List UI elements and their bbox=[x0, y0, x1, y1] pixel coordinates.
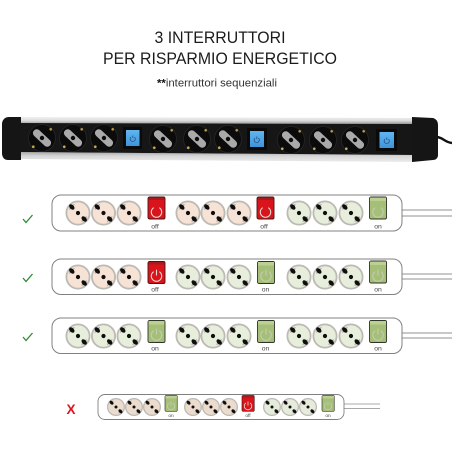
labels: off bbox=[245, 413, 251, 419]
sockets bbox=[66, 201, 251, 225]
labels: on bbox=[262, 286, 269, 294]
strip outline bbox=[52, 259, 402, 294]
diagram row 4: incorrect sequence bbox=[66, 394, 380, 420]
labels: on bbox=[374, 286, 382, 294]
black faceplate bbox=[20, 123, 415, 155]
labels bbox=[151, 286, 382, 294]
labels: off bbox=[151, 286, 159, 294]
blue switch 2 bbox=[247, 128, 267, 150]
strip outline bbox=[98, 394, 344, 420]
labels bbox=[151, 346, 382, 352]
labels bbox=[168, 413, 331, 419]
labels: on bbox=[262, 346, 269, 352]
diagram row 3: on, on, on bbox=[23, 318, 452, 354]
diagram row 2: off, on, on bbox=[23, 259, 452, 294]
silver body bbox=[20, 117, 415, 162]
socket group 3 bbox=[278, 126, 368, 154]
cables bbox=[402, 274, 452, 279]
cables bbox=[402, 333, 452, 338]
diagram row 1: off, off, on bbox=[23, 195, 452, 231]
labels: on bbox=[374, 346, 382, 352]
strip outline bbox=[52, 318, 402, 354]
labels: on bbox=[374, 224, 382, 230]
sockets bbox=[108, 399, 237, 415]
labels: on bbox=[168, 414, 174, 419]
sockets bbox=[66, 324, 363, 348]
labels: on bbox=[325, 414, 331, 419]
switches bbox=[165, 396, 334, 411]
left end cap bbox=[2, 117, 21, 160]
power strip photo bbox=[2, 117, 452, 162]
cables bbox=[402, 210, 452, 216]
switches bbox=[148, 197, 386, 219]
switches bbox=[148, 261, 386, 284]
socket group 2 bbox=[150, 126, 242, 152]
cable bbox=[436, 137, 452, 143]
title bbox=[103, 28, 337, 68]
right end cap bbox=[412, 117, 438, 162]
blue switch 3 bbox=[376, 129, 397, 151]
sockets bbox=[66, 265, 141, 289]
cables bbox=[344, 404, 380, 408]
check mark bbox=[23, 274, 32, 282]
title: 3 INTERRUTTORI bbox=[154, 28, 286, 47]
cross mark: X bbox=[66, 402, 76, 417]
check mark bbox=[23, 333, 32, 340]
title: PER RISPARMIO ENERGETICO bbox=[103, 49, 337, 68]
check mark bbox=[23, 215, 32, 222]
labels: on bbox=[151, 346, 159, 352]
socket group 1 bbox=[28, 124, 118, 152]
subtitle: **interruttori sequenziali bbox=[157, 78, 277, 90]
strip outline bbox=[52, 195, 402, 231]
blue switch 1 bbox=[123, 127, 142, 149]
labels bbox=[151, 224, 382, 230]
labels: off bbox=[260, 224, 268, 230]
switches bbox=[148, 320, 386, 342]
labels: off bbox=[151, 224, 159, 230]
